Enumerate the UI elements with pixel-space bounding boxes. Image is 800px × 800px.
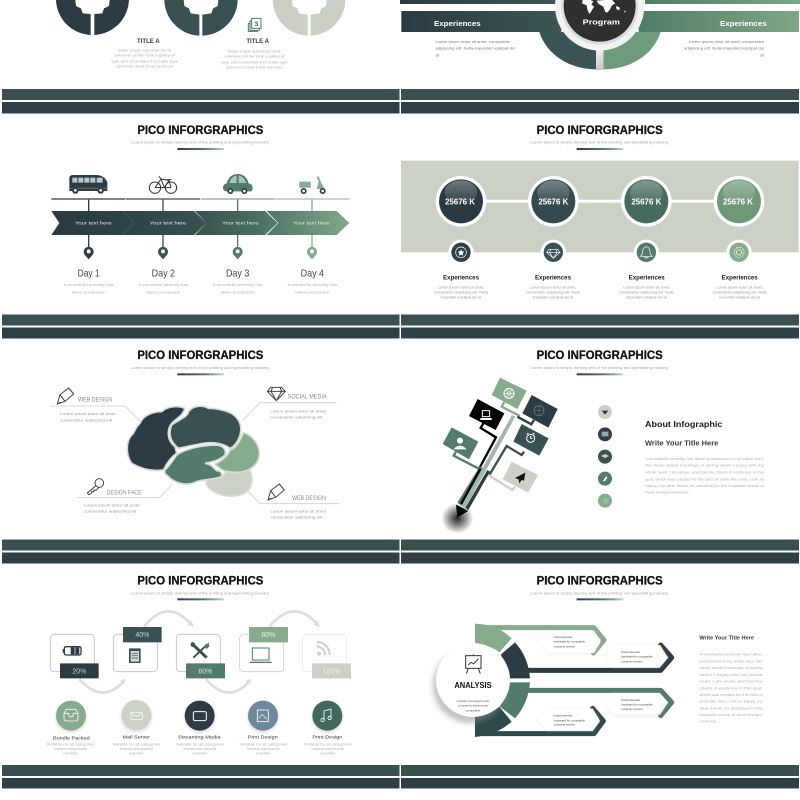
text block: title A left: type and scrambled it to make type: [111, 58, 179, 63]
right text block: possession of my entire soul, like: [699, 658, 764, 663]
icon: scooter: [299, 176, 326, 194]
connector lines: [454, 402, 534, 490]
label: social media: Lorem ipsum dolor sit amet: [270, 409, 327, 414]
text block: right: [684, 39, 765, 58]
day 3 text: A wonderful serenity has: [213, 282, 263, 287]
card: user: [443, 427, 478, 459]
day 1 text: A wonderful serenity has: [64, 282, 114, 287]
text: print design: Suitable for all categories: [304, 741, 352, 746]
heading: PICO INFORGRAPHICS: [537, 123, 663, 137]
heading: Lorem Ipsum is simply dummy text of the printing and typesetting industry.: [530, 591, 669, 595]
stat text 3: imperdiet volutpat dui at: [626, 295, 668, 300]
panel: analysis: [433, 573, 764, 737]
text: print design: [304, 735, 352, 755]
card: paper plane: [503, 462, 538, 493]
sage band: [401, 161, 799, 252]
callout texts: Proactive disseminate: [554, 714, 573, 718]
right text block: which was created for the bliss of: [699, 692, 764, 697]
chevron: segment 2: [123, 211, 207, 235]
text block: title A right: specimen book it has survived: [226, 65, 283, 70]
center divider: [596, 47, 603, 70]
label: web design: consectetur adipiscing elit: [60, 417, 113, 422]
text: print design: business and personal: [311, 746, 344, 751]
icon: world map: [582, 0, 626, 14]
text block: title A left: unknown printer took a galley of: [115, 53, 176, 58]
footer bars: row 3: [2, 540, 799, 564]
ring: teal: [164, 0, 238, 36]
about text: [645, 419, 765, 495]
stat text 3: consectetur adipiscing elit. Nulla: [620, 290, 674, 295]
center badge: Program: [583, 18, 620, 27]
branch: teal arm: [500, 682, 672, 718]
label: design face: Lorem ipsum dolor sit amet: [84, 503, 141, 508]
heading: Lorem Ipsum is simply dummy text of the printing and typesetting industry.: [131, 591, 270, 595]
text block: left: adipiscing elit. Nulla imperdiet volutpat dui: [435, 46, 515, 51]
stat text 4: Lorem ipsum dolor sit amet,: [716, 285, 763, 290]
callout boxes: [537, 631, 667, 731]
heading: Lorem Ipsum is simply dummy text of the printing and typesetting industry.: [131, 366, 270, 370]
right text block: A wonderful serenity has taken: [699, 652, 763, 657]
icon: diamond: [267, 387, 285, 401]
stat text 3: [620, 275, 674, 300]
heading: [131, 573, 270, 600]
about text: About Infographic: [645, 419, 723, 429]
callout texts: backward for compatible: [621, 703, 653, 707]
pin: day 1: [84, 247, 94, 259]
day 3 text: [213, 268, 263, 294]
stat text 4: Experiences: [722, 275, 758, 281]
stat text 1: imperdiet volutpat dui at: [441, 295, 482, 300]
circle: print design music: [312, 701, 343, 733]
brain chart: [127, 406, 259, 496]
text block: left: [435, 39, 515, 58]
circle: mail server: [121, 700, 152, 732]
day 1 text: taken possession: [72, 289, 106, 294]
callout texts: customer service: [621, 659, 643, 663]
text: streaming media: Suitable for all categories: [176, 741, 224, 746]
band: right experiences: Experiences: [720, 21, 767, 28]
label: design face: [84, 490, 142, 514]
text: bundle packed: Suitable for all categories: [47, 741, 95, 746]
text: print design: business and personal: [247, 746, 280, 751]
day 1 text: Day 1: [78, 268, 100, 279]
text: print design: Print Design: [248, 735, 278, 741]
chevron: segment 2: Your text here: [150, 221, 187, 227]
stat 3: [621, 176, 672, 227]
right text block: dear friend, so absorbed in the: [699, 705, 764, 710]
text: bundle packed: business and personal: [54, 746, 87, 751]
icon badge: gear: [726, 240, 752, 265]
footer bars: row 1: [2, 89, 799, 114]
text: mail server: presentation: [129, 750, 144, 755]
day 2 text: Day 2: [152, 268, 175, 279]
label: web design: [270, 496, 327, 519]
chevron: segment 1: Your text here: [75, 221, 112, 227]
stat text 4: [713, 275, 767, 300]
text: streaming media: Streaming Media: [178, 735, 221, 741]
timeline rule: [51, 197, 350, 201]
stat text 2: imperdiet volutpat dui at: [533, 295, 574, 300]
chevron: segment 1: [51, 211, 134, 235]
right text block: which I enjoy with my whole: [699, 672, 764, 677]
analysis circle: compatible: [466, 708, 481, 712]
step 1: 20%: [72, 668, 86, 675]
lobe: teal: [170, 406, 241, 448]
icon: key: [87, 479, 104, 495]
callout texts: Proactive disseminate: [554, 635, 573, 639]
branch: green arm: [475, 624, 604, 653]
lobe: dark: [127, 407, 185, 470]
stat 2: [528, 176, 579, 227]
card: monitor: [469, 399, 504, 430]
analysis circle: Globalize leveraged leader: [457, 699, 489, 703]
day 3 text: Day 3: [226, 268, 249, 279]
step 4: 80%: [261, 632, 275, 639]
heading: Lorem Ipsum is simply dummy text of the printing and typesetting industry.: [530, 366, 669, 370]
text: mail server: business and personal: [120, 746, 153, 751]
ring: dark: [56, 0, 129, 35]
text: print design: [239, 735, 287, 755]
stat text 1: Lorem ipsum dolor sit amet,: [438, 285, 484, 290]
heading: [530, 573, 669, 600]
icon badge: bell: [634, 240, 659, 265]
about text: mere tranquil existence.: [645, 490, 690, 495]
quarter ring: right: [603, 32, 661, 69]
icon: bus: [69, 175, 107, 194]
heading: PICO INFORGRAPHICS: [137, 573, 263, 587]
icon: presentation board: [466, 654, 481, 674]
stat 4: 25676 K: [723, 197, 753, 207]
day 3 text: taken possession: [221, 289, 255, 294]
text block: right: sit: [760, 53, 765, 58]
panel: brain: [50, 348, 339, 519]
chevron: segment 4: [267, 211, 349, 235]
ring: sage: [273, 0, 345, 36]
text: print design: Suitable for all categories: [239, 741, 287, 746]
right text block: these sweet mornings of spring: [699, 665, 763, 670]
label: web design: WEB DESIGN: [78, 398, 112, 404]
icon column: [598, 405, 612, 508]
panel: timeline: [51, 123, 350, 294]
footer bars: row 4: [2, 765, 799, 788]
step 2: 40%: [135, 632, 149, 639]
day 2 text: taken possession: [146, 289, 180, 294]
step 2: [113, 627, 162, 672]
right text block: Write Your Title Here: [699, 636, 754, 642]
band: left experiences: Experiences: [434, 21, 481, 28]
text: bundle packed: presentation: [63, 750, 78, 755]
step 5: 100%: [323, 668, 341, 675]
stat text 4: consectetur adipiscing elit. Nulla: [713, 290, 767, 295]
stat text 1: consectetur adipiscing elit. Nulla: [434, 290, 489, 295]
text block: left: Lorem ipsum dolor sit amet, consectetur: [435, 39, 511, 44]
label: social media: SOCIAL MEDIA: [288, 395, 327, 401]
stat text 2: Experiences: [535, 275, 572, 281]
day 2 text: [138, 268, 188, 294]
arrows: [79, 611, 320, 693]
stat 2: 25676 K: [538, 197, 568, 207]
stat text 1: [434, 275, 489, 300]
branch: dark arm: [501, 642, 672, 678]
heading: [131, 123, 270, 150]
label: social media: [270, 395, 327, 420]
analysis circle: ANALYSIS: [454, 681, 492, 690]
pencil: [456, 415, 515, 517]
analysis circle: completely disseminate: [458, 704, 488, 708]
chevron: segment 3: [195, 211, 278, 235]
callout texts: Proactive disseminate: [621, 650, 640, 654]
band: right experiences: [639, 11, 799, 32]
heading: [530, 123, 669, 150]
heading: PICO INFORGRAPHICS: [137, 123, 263, 137]
pin: day 4: [307, 247, 317, 259]
stat text 2: [526, 275, 581, 300]
text block: title A right: Make a type specimen book: [228, 48, 281, 53]
stat text 4: imperdiet volutpat dui at: [719, 295, 761, 300]
icon: bicycle: [149, 176, 177, 193]
callout texts: Proactive disseminate: [621, 698, 640, 702]
about text: like these sweet mornings of spring which I enjoy with my: [645, 463, 764, 468]
text: print design: presentation: [320, 750, 335, 755]
circle: bundle packed: [56, 701, 86, 733]
panel: segmented rings: [56, 0, 345, 70]
connectors: [89, 200, 312, 248]
callout texts: [554, 635, 653, 727]
text block: title A right: [221, 38, 289, 70]
label: social media: consectetur adipiscing elit: [270, 415, 323, 420]
pin: day 2: [158, 247, 168, 259]
text block: title A right: TITLE A: [246, 38, 269, 45]
label: design face: consectetur adipiscing elit: [84, 509, 137, 514]
text: print design: presentation: [256, 750, 271, 755]
day 4 text: taken possession: [295, 289, 329, 294]
pencil shadow: [441, 503, 473, 534]
day 1 text: [64, 268, 114, 294]
icon: numbered stack: [248, 18, 261, 31]
text: bundle packed: Bundle Packed: [53, 735, 90, 741]
icon: pencil: [57, 388, 74, 404]
text: streaming media: business and personal: [184, 746, 216, 751]
label: web design: consectetur adipiscing elit: [270, 514, 323, 519]
chevron: segment 3: Your text here: [222, 221, 259, 227]
branch: dark bottom arm: [475, 707, 603, 737]
stat text 2: consectetur adipiscing elit. Nulla: [526, 290, 581, 295]
card: globe: [492, 378, 527, 409]
band: left experiences: [401, 11, 561, 32]
right text block: [699, 636, 764, 724]
callout texts: customer service: [554, 723, 575, 727]
leader lines: [50, 403, 339, 504]
pin: day 3: [233, 247, 243, 259]
text: print design: Print Design: [312, 735, 343, 741]
stat 1: 25676 K: [445, 197, 475, 207]
card: network: [522, 395, 558, 428]
step 1: [50, 634, 99, 678]
step 3: [176, 634, 225, 678]
lobe: light green: [215, 433, 259, 472]
text block: right: Lorem ipsum dolor sit amet, consectetur: [689, 39, 765, 44]
about text: Write Your Title Here: [645, 441, 718, 448]
callout texts: backward for compatible: [621, 655, 653, 659]
callout texts: customer service: [621, 707, 643, 711]
chevron: segment 4: Your text here: [293, 221, 330, 227]
icon: car: [223, 174, 253, 194]
text block: title A right: type and scrambled it to make type: [221, 59, 289, 64]
panel: program: [400, 0, 800, 70]
text: mail server: [112, 734, 160, 755]
text block: title A right: unknown printer took a galley of: [224, 54, 285, 59]
right text block: existence.: [699, 719, 717, 724]
heading: [530, 348, 669, 375]
stat 1: [436, 176, 486, 227]
right text block: charm of existence in this spot,: [699, 685, 763, 690]
quarter ring: left: [539, 32, 596, 69]
text: bundle packed: [47, 735, 95, 755]
heading: PICO INFORGRAPHICS: [537, 573, 663, 587]
label: web design: Lorem ipsum dolor sit amet: [60, 411, 117, 416]
stat 3: 25676 K: [631, 197, 661, 207]
heading: PICO INFORGRAPHICS: [137, 348, 263, 362]
text block: left: sit: [435, 53, 440, 58]
text: mail server: Suitable for all categories: [112, 741, 160, 746]
step 5: [303, 634, 351, 678]
connector line: [461, 200, 739, 203]
text block: title A left: [111, 38, 179, 69]
heading: Lorem Ipsum is simply dummy text of the printing and typesetting industry.: [530, 141, 669, 145]
day 2 text: A wonderful serenity has: [138, 282, 188, 287]
stat 4: [714, 176, 764, 227]
panel: progress steps: [47, 573, 352, 755]
day 4 text: Day 4: [301, 268, 325, 279]
circle: print design: [248, 701, 278, 733]
text block: title A left: TITLE A: [137, 38, 160, 45]
heading: Lorem Ipsum is simply dummy text of the printing and typesetting industry.: [131, 141, 270, 145]
about text: A wonderful serenity has taken possession of my entire soul,: [645, 456, 764, 461]
stat text 3: Lorem ipsum dolor sit amet,: [623, 285, 670, 290]
about text: happy, my dear friend, so absorbed in the exquisite sense of: [645, 483, 765, 488]
text block: title A left: Make a type specimen book: [118, 47, 171, 52]
step 3: 60%: [198, 668, 212, 675]
text: streaming media: presentation: [193, 750, 207, 755]
card: alarm clock: [513, 424, 549, 456]
text block: right: adipiscing elit. Nulla imperdiet volutpat dui: [684, 46, 764, 51]
circle: streaming media: [184, 701, 215, 733]
callout texts: customer service: [554, 644, 575, 648]
heading: PICO INFORGRAPHICS: [537, 348, 663, 362]
label: web design: [60, 398, 117, 422]
day 4 text: A wonderful serenity has: [287, 282, 337, 287]
icon badge: diamond: [541, 240, 566, 265]
about text: spot, which was created for the bliss of souls like mine. I am so: [645, 476, 765, 481]
label: design face: DESIGN FACE: [107, 490, 142, 496]
about text: whole heart. I am alone, and feel the charm of existence in this: [645, 470, 764, 475]
right text block: exquisite sense of mere tranquil: [699, 712, 763, 717]
analysis circle: [433, 643, 510, 723]
top strips: [400, 0, 800, 4]
right text block: heart. I am alone, and feel the: [699, 679, 764, 684]
label: web design: Lorem ipsum dolor sit amet: [270, 508, 327, 513]
lobe: green: [165, 445, 225, 484]
right text block: souls like mine. I am so happy, my: [699, 699, 763, 704]
callout texts: backward for compatible: [554, 718, 585, 722]
heading: [131, 348, 270, 375]
icon: numbered stack: 3: [254, 21, 258, 28]
day 4 text: [287, 268, 337, 294]
panel: stats: [401, 123, 799, 300]
stat text 2: Lorem ipsum dolor sit amet,: [530, 285, 576, 290]
stat text 1: Experiences: [443, 275, 480, 281]
stat text 3: Experiences: [629, 275, 665, 281]
center badge: [555, 0, 644, 51]
icon: pencil: [268, 484, 284, 500]
panel: pencil tree: [441, 348, 765, 534]
lobe: sage: [206, 470, 252, 496]
footer bars: row 2: [2, 314, 799, 338]
text: streaming media: [176, 735, 224, 755]
step 4: [240, 627, 288, 672]
callout texts: backward for compatible: [554, 640, 585, 644]
icon badge: star: [448, 240, 474, 265]
text: mail server: Mail Server: [123, 734, 150, 740]
text block: title A left: specimen book it has survived: [116, 64, 173, 69]
label: web design: WEB DESIGN: [292, 496, 326, 502]
